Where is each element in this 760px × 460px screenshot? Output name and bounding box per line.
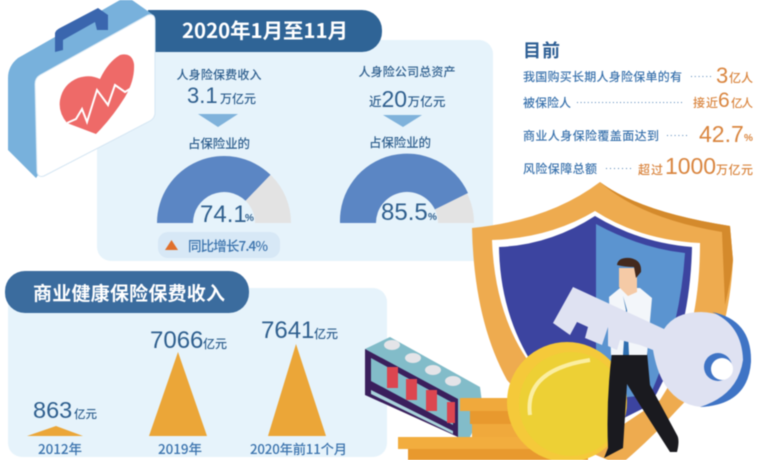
icon: test tube rack: [365, 337, 483, 437]
icon: large gold coin: [507, 342, 627, 460]
row: total risk protection: [523, 153, 753, 179]
bar: first 11 months of 2020: 7641: [261, 317, 314, 344]
row: insured people: 被保险人: [523, 94, 571, 111]
metric: life insurers total assets: [358, 63, 456, 151]
row: total risk protection: ·······: [605, 163, 632, 173]
bar: 2019: 7066: [150, 327, 203, 354]
row: insured people: 亿人: [731, 95, 754, 111]
figure: man carrying key: [604, 258, 678, 458]
row: long term policy holders: 亿人: [729, 69, 753, 86]
metric: life insurance premium income: 3.1: [187, 83, 218, 108]
gauge: 74.1 percent: 74.1: [200, 201, 247, 228]
bar: 2012: 863: [33, 397, 72, 423]
bar: first 11 months of 2020: 亿元: [314, 325, 338, 342]
gauge: 85.5 percent: 85.5: [381, 199, 428, 226]
row: commercial coverage: ······: [666, 130, 688, 140]
metric: life insurance premium income: 万亿元: [220, 90, 256, 107]
row: insured people: ······························: [576, 97, 683, 107]
icon: medical briefcase with heart: [8, 0, 155, 178]
bar: 2019: 亿元: [203, 335, 227, 352]
row: total risk protection: 超过: [638, 161, 663, 178]
gauge: 74.1 percent: %: [245, 213, 254, 224]
heading: health insurance: 商业健康保险保费收入: [33, 279, 225, 306]
row: total risk protection: 万亿元: [716, 161, 753, 178]
bar: 2019: 2019年: [158, 438, 202, 458]
callout: year on year growth 7.4 percent: 同比增长7.4%: [188, 235, 268, 255]
bar: first 11 months of 2020: [250, 317, 347, 458]
row: total risk protection: 1000: [665, 153, 716, 179]
metric: life insurers total assets: 人身险公司总资产: [358, 63, 456, 80]
gauge: 85.5 percent: %: [428, 212, 437, 223]
metric: life insurance premium income: [176, 66, 262, 152]
heading: 2020 period: 2020年1月至11月: [182, 14, 348, 44]
heading: health insurance: [5, 271, 249, 313]
panel: 2020 January to November: [97, 10, 493, 261]
row: long term policy holders: 3: [716, 63, 728, 88]
icon: large key: [553, 287, 751, 407]
bar: 2019: [149, 327, 227, 458]
metric: life insurers total assets: 万亿元: [408, 91, 446, 110]
illustration: shield, key, man, coins and test tubes: [365, 182, 751, 460]
row: insured people: 接近: [693, 94, 718, 111]
gauge: 74.1 percent: [157, 156, 291, 228]
row: commercial coverage: 商业人身保险覆盖面达到: [523, 127, 659, 144]
row: commercial coverage: %: [744, 133, 753, 144]
metric: life insurers total assets: 占保险业的: [369, 132, 431, 151]
heading: 2020 period: [148, 10, 382, 52]
bar: 2012: [27, 397, 97, 458]
row: insured people: 6: [718, 89, 730, 112]
bar: 2012: 亿元: [74, 406, 97, 422]
panel: current status list: [523, 37, 754, 179]
row: insured people: [523, 89, 754, 112]
metric: life insurance premium income: 人身险保费收入: [176, 66, 262, 83]
metric: life insurers total assets: 近: [369, 91, 382, 110]
metric: life insurance premium income: 占保险业的: [188, 133, 250, 152]
row: commercial coverage: [523, 121, 753, 147]
row: long term policy holders: 我国购买长期人身险保单的有: [523, 68, 682, 85]
bar: first 11 months of 2020: 2020年前11个月: [250, 439, 347, 458]
panel: commercial health insurance premium income: [5, 271, 387, 458]
row: long term policy holders: ······: [690, 71, 712, 81]
bar: 2012: 2012年: [38, 438, 82, 458]
gauge: 85.5 percent: [340, 154, 474, 226]
row: long term policy holders: [523, 63, 753, 88]
icon: coin stacks: [398, 398, 588, 460]
metric: life insurers total assets: 20: [382, 86, 407, 112]
heading: currently: 目前: [523, 37, 560, 63]
callout: year on year growth 7.4 percent: [158, 232, 280, 258]
shield: [472, 182, 733, 460]
row: total risk protection: 风险保障总额: [523, 160, 597, 177]
row: commercial coverage: 42.7: [699, 121, 744, 147]
